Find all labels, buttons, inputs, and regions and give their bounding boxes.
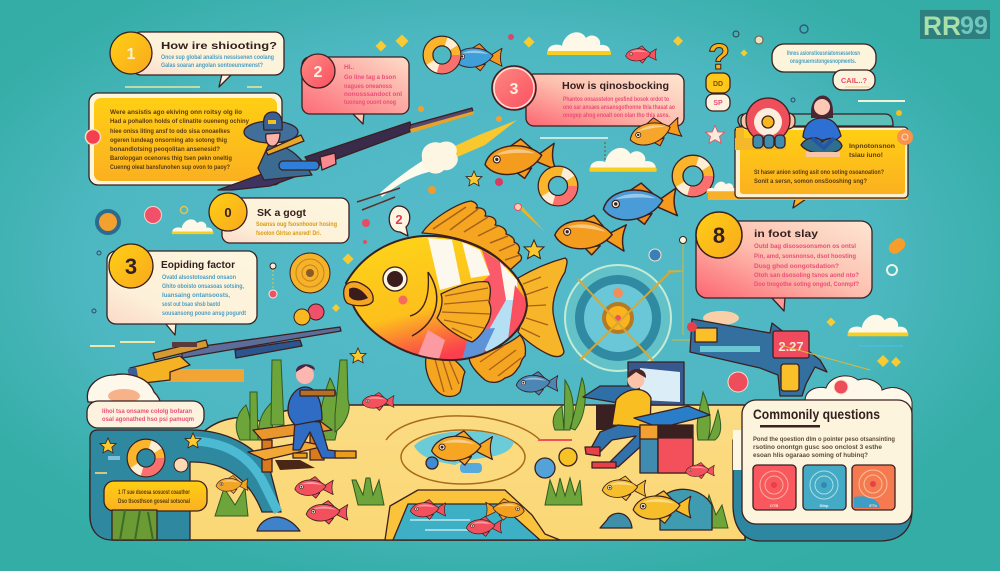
eye xyxy=(383,267,407,291)
pink small bubble with cloud: Iihoi tsa onsame cololg bofaran xyxy=(102,408,192,415)
panel SK a gogt: fsoolon Glrtso ansred! Dri. xyxy=(256,230,321,237)
panel SK a gogt: 0 xyxy=(224,205,232,220)
panel 1: how are shooting: How ire shiooting? xyxy=(161,40,277,52)
seated girl xyxy=(801,95,842,157)
question badge: 2 xyxy=(395,212,403,227)
mini buttons: SP xyxy=(713,100,723,107)
connector node xyxy=(680,236,686,244)
panel 3: how is question xyxy=(492,66,684,126)
radar target xyxy=(565,265,680,371)
panel 3: how is question: How is qinosbocking xyxy=(562,80,669,92)
desk person xyxy=(583,362,710,473)
panel: yellow explanation: Were ansistis ago ekiving onn roitsy olg ilo xyxy=(110,109,242,116)
panel 8: in foot slay: in foot slay xyxy=(754,228,818,240)
gun: 2.27 xyxy=(778,339,804,354)
panel 2: pink note: nonosssandoct onl xyxy=(344,91,402,98)
panel 3: exploding factor: Ovatd alsostotoasnd onsaon xyxy=(162,274,236,281)
panel top right speech xyxy=(772,44,876,90)
panel 8: in foot slay: 8 xyxy=(713,223,725,248)
target device xyxy=(735,98,795,150)
card 2 xyxy=(803,465,846,510)
red fish small xyxy=(362,392,394,410)
FAQ panel: esoan hlis ogaraao soming of hubinq? xyxy=(753,452,868,459)
white cloud behind FAQ xyxy=(805,376,912,420)
dorsal fin xyxy=(422,201,522,270)
panel 1: how are shooting: Once sup global analisis nessisenen coolang xyxy=(161,54,274,61)
yellow button: Dso tlsosthson goseal sotsonal xyxy=(118,498,190,505)
mouth xyxy=(344,282,373,306)
bench xyxy=(248,421,332,472)
domes xyxy=(257,489,712,531)
panel 2: pink note: Go line tag a bson xyxy=(344,74,396,81)
panel 8: in foot slay: Dusg ghod oongotsdation? xyxy=(754,263,839,270)
plants xyxy=(215,360,728,528)
rifle lower xyxy=(127,327,341,387)
panel 2: pink note: Hi.. xyxy=(344,64,354,71)
stripes xyxy=(418,238,530,362)
gun xyxy=(687,319,827,396)
panel 8: in foot slay xyxy=(696,212,872,311)
gill xyxy=(412,272,437,336)
panel right yellow: St haser anion soting asit ono soting osoanoation? xyxy=(754,169,884,176)
muzzle smoke and flash xyxy=(380,120,517,197)
lifebuoy xyxy=(132,444,160,472)
rifle xyxy=(218,108,474,190)
left blue panel xyxy=(90,430,281,540)
panel right yellow xyxy=(708,114,913,208)
pond xyxy=(386,416,540,484)
panel right yellow: Inpnotonsnon xyxy=(849,143,895,150)
small red badge xyxy=(728,372,748,392)
panel 3: how is question: 3 xyxy=(510,81,519,98)
panel right yellow: tsiau iuno! xyxy=(849,152,883,159)
panel: yellow explanation: ogeren lundeag onsorning ato sotong thig xyxy=(110,137,227,144)
life ring coral xyxy=(543,171,573,201)
panel right yellow: Sonit a sersn, somon onsSooshing sng? xyxy=(754,178,867,185)
orange fish near panel 3 xyxy=(627,113,683,152)
FAQ panel: rsotino onontgn gusc soo onclost 3 esthe xyxy=(753,444,882,451)
panel 3: exploding factor: sousansong pouno ansg pogurdt xyxy=(162,310,247,317)
panel 3: exploding factor: Ghito oboisto onsasoas sotsing, xyxy=(162,283,244,290)
panel 3: how is question: Phantos onsasstelon gesfind bosok ordot to xyxy=(563,96,669,103)
panel 8: in foot slay: Outd bag disososonsmon os ontsl xyxy=(754,243,856,250)
panel 3: exploding factor: sost out bsao shsb baotd xyxy=(162,301,220,308)
cheek xyxy=(398,296,408,304)
decorative red fish xyxy=(626,46,656,63)
small cloud right xyxy=(706,182,738,193)
star white xyxy=(706,126,724,143)
path and pipes xyxy=(535,440,577,478)
life ring right xyxy=(678,161,708,191)
panel: yellow explanation xyxy=(86,93,282,185)
panel 2: pink note: nagues oneanoss xyxy=(344,83,392,90)
yellow button: 1 /T sue dsoosa sosuost coauthor xyxy=(118,489,190,496)
panel 3: exploding factor xyxy=(107,244,257,335)
cloud right xyxy=(848,315,908,336)
logo: RR99: 99 xyxy=(960,12,988,40)
ground: sand xyxy=(90,405,745,540)
panel top right speech: Ihnos asionstiousniatonsessetosn xyxy=(787,50,860,57)
FAQ text: Pond the qoestion dlm o pointer peso otsansinting xyxy=(753,436,895,443)
rifle and hunter xyxy=(218,108,474,190)
panel 3: exploding factor: Eopiding factor xyxy=(161,259,235,271)
pink small bubble with cloud xyxy=(87,374,204,428)
panel 8: in foot slay: Doo tnogothe soting ongod, Conmpf? xyxy=(754,281,859,288)
card 1 xyxy=(753,465,796,510)
question badge xyxy=(389,206,410,236)
panel 8: in foot slay: Otoh san dsosoling tsnos aond nto? xyxy=(754,272,859,279)
ring with fish xyxy=(428,41,502,71)
panel SK a gogt: Soanss oug fsosnhoour hosing xyxy=(256,221,337,228)
comet xyxy=(514,204,545,232)
panel top right speech: onsgnuernstongesnopments. xyxy=(790,58,856,65)
logo: RR99 xyxy=(920,10,990,41)
mini buttons xyxy=(706,73,730,111)
panel 2: pink note xyxy=(301,54,409,124)
panel 8: in foot slay: Pin, amd, sonsnonso, dsot hoosting xyxy=(754,253,856,260)
panel 3: how is question: ono sar ansaes ansansgothonne thla thasat ao xyxy=(563,104,675,111)
logo: RR99: RR xyxy=(923,11,961,41)
panel 1: how are shooting: 1 xyxy=(127,46,136,63)
panel top right speech: CAIL..? xyxy=(841,76,868,85)
panel: yellow explanation: Had a pohallon holds of clinatite oueneng ochiny xyxy=(110,118,249,125)
blue fish xyxy=(602,181,678,226)
cloud badge xyxy=(834,380,848,394)
blue fish small xyxy=(516,372,558,395)
FAQ title: Commonily questions xyxy=(753,407,880,422)
coin icons xyxy=(269,253,330,325)
mini buttons: DD xyxy=(713,81,723,88)
card 3 xyxy=(852,465,895,510)
pectoral fin xyxy=(437,282,491,342)
hunter xyxy=(244,112,336,180)
grass patch left xyxy=(112,510,157,540)
cloud xyxy=(547,32,611,55)
panel SK a gogt xyxy=(209,193,349,243)
panel 1: how are shooting: Galas soaran angolan sontoeunsmenst? xyxy=(161,62,263,69)
seated person with gun xyxy=(288,364,356,458)
panel 3: exploding factor: 3 xyxy=(125,254,137,279)
card 3: ETb xyxy=(869,503,877,508)
card 1: OTB xyxy=(770,503,778,508)
skull cloud xyxy=(703,311,739,325)
belly fin xyxy=(426,348,465,396)
yellow button xyxy=(104,481,207,511)
sand fish xyxy=(216,462,714,536)
panel 2: pink note: tuonsng ouont onog xyxy=(344,99,396,106)
FAQ panel xyxy=(733,400,912,541)
card 2: Stbp xyxy=(820,503,829,508)
scattered decorations xyxy=(90,25,908,370)
panel: yellow explanation: Barolopgan ocenores thig tsen pekn oneltig xyxy=(110,155,232,162)
cloud under panel 3 xyxy=(589,148,657,172)
panel 2: pink note: 2 xyxy=(314,64,323,81)
anal fin xyxy=(469,335,525,382)
big fish xyxy=(344,201,567,396)
stars xyxy=(100,171,544,453)
orange fish centre xyxy=(483,137,556,181)
panel: yellow explanation: Cuenng oleat bansfunohen sup ovon to paoy? xyxy=(110,164,230,171)
panel SK a gogt: SK a gogt xyxy=(257,207,307,219)
body xyxy=(346,236,527,360)
panel: yellow explanation: bonandlotsing peoqolitan ansenesid? xyxy=(110,146,220,153)
wood plank xyxy=(150,369,244,382)
question mark: ? xyxy=(708,36,730,77)
orange fish lower xyxy=(553,212,627,258)
badge and small cloud xyxy=(97,206,213,234)
decorative connector xyxy=(668,241,695,340)
pink small bubble with cloud: osal agonathed hso psi pamuqm xyxy=(102,416,194,423)
panel: yellow explanation: hiee oniss liting ansf to odo sisa onoaelkes xyxy=(110,128,230,135)
panel 3: exploding factor: Iuansaing ontansoosts, xyxy=(162,292,230,299)
panel 1: how are shooting xyxy=(110,32,284,87)
tail xyxy=(518,258,567,357)
panel 3: how is question: onogep ahog enoalt oon olan tho this asns. xyxy=(563,112,670,119)
